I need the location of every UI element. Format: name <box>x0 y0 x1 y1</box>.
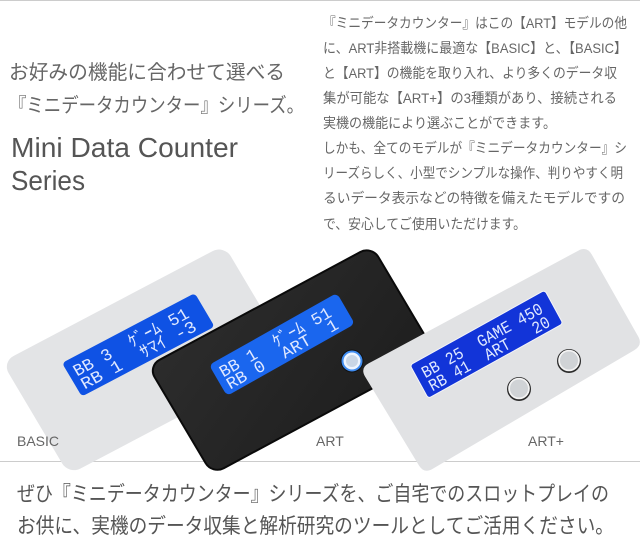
screen: ART LCD: RB 0 ART 1 <box>224 317 343 395</box>
heading: Mini Data Counter Series <box>11 132 238 196</box>
button: ART illuminated <box>340 350 364 372</box>
heading: Japanese lead <box>9 61 304 117</box>
heading: Japanese lead: お好みの機能に合わせて選べる <box>9 61 285 84</box>
device: ART <box>148 246 436 474</box>
label: ART+: ART+ <box>528 433 564 449</box>
text block: description: 集が可能な【ART+】の3種類があり、接続される <box>323 90 617 106</box>
button: ART+ upper <box>557 349 581 373</box>
text block: description <box>323 15 627 232</box>
screen: ART+ LCD: RB 41 ART 20 <box>426 314 554 397</box>
heading: Japanese lead: 『ミニデータカウンター』シリーズ。 <box>9 94 304 117</box>
label: ART: ART <box>316 433 344 449</box>
text block: description: 実機の機能により選ぶことができます。 <box>323 115 556 131</box>
text block: description: と【ART】の機能を取り入れ、より多くのデータ収 <box>323 65 617 81</box>
screen: ART LCD <box>209 293 356 398</box>
screen: BASIC LCD <box>62 293 215 397</box>
screen: ART LCD: BB 1 ｹﾞｰﾑ 51 <box>216 303 336 383</box>
screen: ART+ LCD: BB 25 GAME 450 <box>419 301 547 384</box>
heading: Mini Data Counter Series: Mini Data Counter <box>11 132 238 163</box>
footer message <box>17 483 614 538</box>
text block: description: で、安心してご使用いただけます。 <box>323 216 526 232</box>
label: BASIC: BASIC <box>17 433 59 449</box>
heading: Mini Data Counter Series: Series <box>11 165 85 196</box>
button: ART+ lower <box>507 377 531 401</box>
device: ART+ <box>363 249 640 471</box>
screen: BASIC LCD: RB 1 ｻﾏｲ -3 <box>78 318 201 395</box>
device: BASIC <box>2 245 291 475</box>
screen: BASIC LCD: BB 3 ｹﾞｰﾑ 51 <box>69 304 193 382</box>
text block: description: るいデータ表示などの特徴を備えたモデルですの <box>323 190 625 206</box>
